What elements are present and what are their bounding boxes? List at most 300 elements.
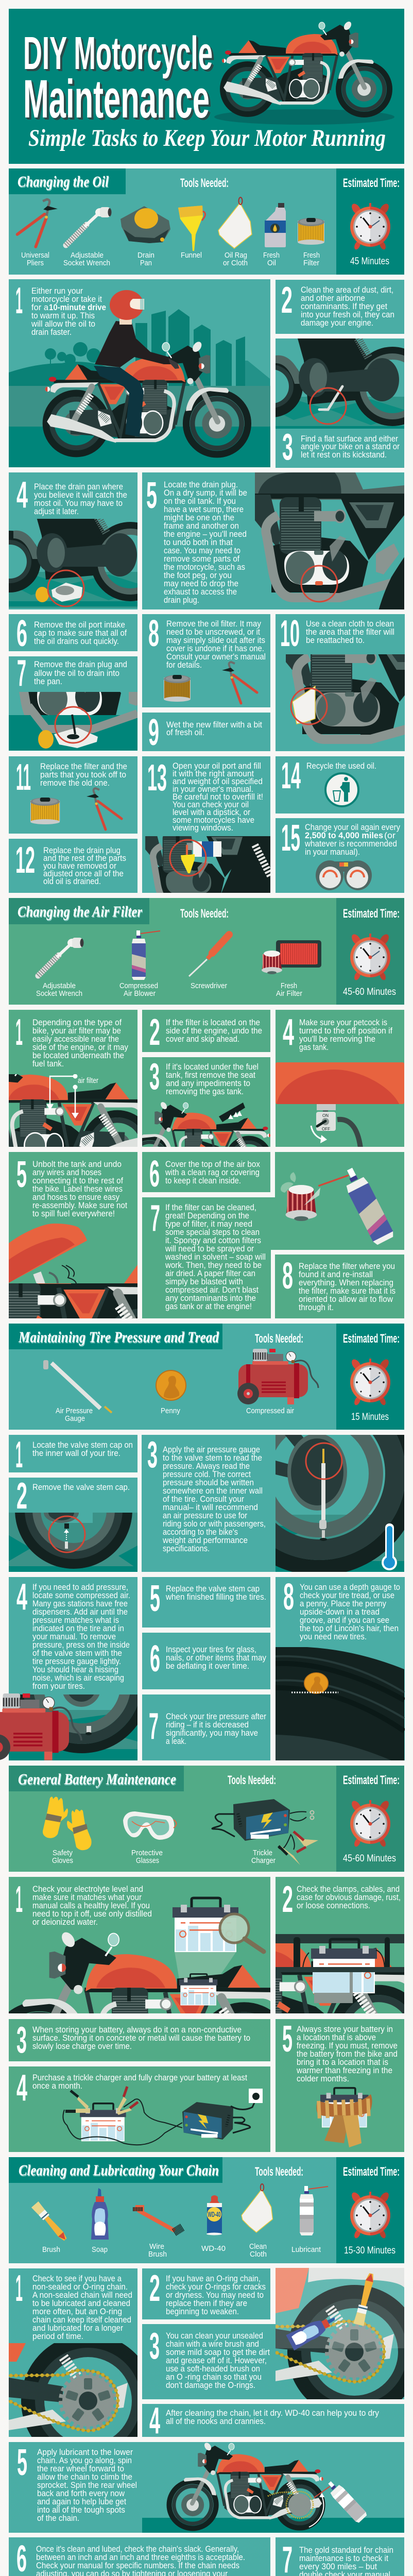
step text — [166, 720, 262, 737]
step text: the engine – you'll need — [164, 529, 247, 539]
step text — [32, 1018, 128, 1069]
step number: 2 — [149, 1012, 160, 1053]
tool labels: Funnel — [181, 251, 202, 260]
step text: riding – if it is decreased — [166, 1720, 249, 1730]
step text: remove some parts of — [164, 554, 239, 564]
step text: somewhere on the inner wall — [163, 1486, 263, 1496]
panel: oil step 11: 11 — [16, 757, 31, 798]
icon: funnel — [178, 206, 205, 251]
tool labels — [56, 1406, 294, 1423]
step text: fuel tank. — [32, 1059, 64, 1069]
heading: Maintaining Tire Pressure and Tread — [18, 1329, 219, 1346]
step text: don't damage the O-rings. — [166, 2380, 255, 2390]
step text: If the filter is located on the — [166, 1018, 260, 1027]
step text: Always store your battery in — [297, 2024, 393, 2034]
step text: a penny. Place the penny — [300, 1599, 386, 1608]
icon: pliers — [87, 788, 124, 829]
step text: Either run your — [31, 286, 83, 296]
step number: 8 — [283, 1577, 294, 1618]
step text: beginning to weaken. — [166, 2307, 239, 2316]
step text: be deflating it over time. — [166, 1661, 249, 1671]
step text: level with a dipstick, or — [173, 807, 250, 817]
estimated time value: 45 Minutes — [350, 256, 389, 267]
illustration: cloth cleaning engine — [286, 654, 405, 744]
tool labels: Compressed air — [246, 1406, 294, 1415]
step text: allow the oil to drain into — [34, 668, 119, 678]
tools heading: Tools Needed: — [228, 1773, 276, 1787]
tool labels: Brush — [42, 2245, 60, 2254]
step text: upside-down in a tread — [300, 1607, 380, 1617]
panel: air step 6 — [142, 1152, 270, 1195]
illustration: air filter location — [9, 1074, 137, 1147]
step text: and weight of oil specified — [173, 776, 263, 786]
step text: pressure. Always read the — [163, 1461, 250, 1471]
tool labels: Gloves — [52, 1856, 73, 1865]
tool labels — [42, 2242, 321, 2259]
step text: Make sure your petcock is — [299, 1018, 387, 1027]
step text: you'll be removing the — [299, 1034, 375, 1044]
step text: Purchase a trickle charger and fully charge your battery at least — [32, 2073, 247, 2082]
illustration: petcock off: ON — [322, 1113, 329, 1118]
panel: air step 1 — [9, 1010, 137, 1147]
icon: gloves — [43, 1797, 92, 1850]
step text: and any impediments to — [166, 1078, 250, 1088]
panel: tire step 5 — [142, 1577, 270, 1628]
step text: found it and re-install — [299, 1269, 373, 1279]
panel: tire step 3: 3 — [147, 1434, 158, 1476]
icon: fresh filter — [298, 218, 324, 245]
tool labels: Penny — [161, 1406, 180, 1415]
step text: Replace the filter where you — [299, 1261, 395, 1271]
step text: weight and performance — [162, 1535, 248, 1545]
panel: battery step 2 — [276, 1877, 404, 2013]
panel: tire step 1: 1 — [15, 1434, 23, 1476]
step text: Check your electrolyte level and — [32, 1884, 143, 1894]
step text: the filter, make sure that it is — [299, 1286, 395, 1296]
panel: tire step 5: 5 — [150, 1578, 160, 1619]
step text: any wires and hoses — [32, 1167, 101, 1177]
step text — [164, 480, 247, 605]
step text: any contaminants into the — [165, 1293, 256, 1303]
tool labels: Soap — [92, 2245, 108, 2254]
step text: case for obvious damage, rust, — [297, 1892, 401, 1902]
step text: Remove the drain plug and — [34, 659, 127, 669]
step text: a location that is above — [297, 2032, 376, 2042]
step text: air dried. A paper filter can — [165, 1268, 255, 1278]
tools heading: Tools Needed: — [180, 176, 229, 190]
illustration: petcock off — [276, 1062, 404, 1148]
step text: when finished filling the tires. — [165, 1592, 266, 1602]
step text: manual calls a healthy level. If you — [32, 1901, 150, 1910]
illustration: removing seat — [142, 1102, 270, 1147]
step text: chain can keep itself cleaned — [32, 2315, 131, 2325]
step text: tank, first remove the seat — [166, 1070, 255, 1080]
step text: 10-minute drive — [49, 302, 106, 312]
step text: locate some compressed air. — [32, 1590, 130, 1600]
step text: adjusted once all of the — [43, 869, 124, 878]
step text: pressure cold. The correct — [163, 1469, 251, 1479]
panel: oil step 14: 14 — [281, 755, 301, 796]
step text: warmer than freezing in the — [296, 2065, 392, 2075]
panel: oil step 7: 7 — [17, 653, 26, 694]
step text: Recycle the used oil. — [306, 761, 376, 771]
step text: chain. As you go along, spin — [37, 2455, 132, 2465]
step text: with a clean rag or covering — [165, 1167, 260, 1177]
step text: drain plug. — [164, 595, 199, 605]
step text: simply be blasted with — [165, 1277, 243, 1286]
step text: motorcycle or take it — [31, 294, 102, 304]
step text — [165, 1202, 266, 1311]
panel: chain step 4 — [142, 2400, 404, 2442]
panel: battery step 3: 3 — [16, 2020, 27, 2061]
step text: turned to the off position if — [299, 1026, 392, 1036]
tools heading: Tools Needed: — [255, 1332, 303, 1346]
tool labels: Socket Wrench — [36, 989, 82, 998]
step text: an O -ring chain so that you — [166, 2372, 262, 2382]
step text: Many gas stations have free — [32, 1599, 128, 1608]
illustration: rider on motorcycle in city — [9, 290, 270, 467]
step text: the pan. — [34, 676, 62, 686]
ground shadow — [214, 109, 394, 125]
tool labels: Drain — [137, 251, 154, 260]
step text: need to be unscrewed, or it — [166, 627, 260, 637]
step text: the area that the filter will — [306, 627, 394, 637]
icon: goggles — [123, 1811, 176, 1840]
tool labels: Wire — [149, 2242, 164, 2251]
tool labels: Protective — [131, 1849, 163, 1857]
step text: The gold standard for chain — [299, 2545, 393, 2555]
step text: the inner wall of your tire. — [32, 1448, 121, 1458]
step text: you need new tires. — [300, 1632, 367, 1641]
step text: great! Depending on the — [165, 1211, 249, 1221]
tool labels: Air Pressure — [56, 1406, 93, 1415]
step text — [304, 822, 400, 857]
panel: oil step 12 — [9, 839, 137, 893]
step text: Apply lubricant to the lower — [37, 2447, 133, 2457]
panel: oil step 1: 1 — [15, 280, 23, 321]
step text: Replace the drain plug — [43, 845, 121, 855]
step text: adjust it later. — [34, 506, 79, 516]
step text — [32, 2025, 250, 2051]
step text: allow the chain to climb the — [37, 2472, 132, 2482]
step text — [166, 1711, 266, 1746]
step text — [299, 1261, 395, 1312]
step text: Wet the new filter with a bit — [166, 720, 262, 730]
step text: nails, or other items that may — [166, 1653, 266, 1663]
step text: on the oil tank. If you — [164, 496, 236, 506]
title: Maintenance — [23, 69, 210, 129]
step text: case. You may need to — [164, 546, 240, 555]
step text: cover is undone if it has one. — [166, 643, 264, 653]
step text: remove the old one. — [40, 778, 110, 788]
tool labels: Air Blower — [124, 989, 156, 998]
step text: to the valve stem to read the — [163, 1453, 262, 1463]
tool labels: Cloth — [250, 2250, 267, 2259]
tool labels: Adjustable — [71, 251, 104, 260]
tool labels: Safety — [53, 1849, 73, 1857]
step text — [37, 2447, 137, 2523]
step text: replace them if they are — [166, 2298, 247, 2308]
motorcycle illustration — [222, 20, 389, 114]
step text: the rear wheel forward to — [37, 2464, 124, 2473]
step text: pressure should be written — [163, 1478, 254, 1487]
step text: of the valve stem with the — [32, 1648, 122, 1658]
step text: and hoses to ensure easy — [32, 1192, 119, 1202]
step text: work. Then, they need to be — [165, 1260, 262, 1270]
step text: specifications. — [163, 1544, 210, 1553]
illustration: air filter location: air filter — [78, 1076, 98, 1085]
section header: changing the air filter — [9, 898, 404, 1005]
step text — [299, 1018, 392, 1052]
tool labels: Glasses — [136, 1856, 159, 1865]
step number: 5 — [146, 475, 157, 516]
estimated time value: 15-30 Minutes — [344, 2245, 395, 2256]
panel: air step 7 — [142, 1152, 404, 1318]
step text: frame and another on — [164, 521, 239, 531]
illustration: valve stem cap — [9, 1513, 137, 1572]
step text: removing the gas tank. — [166, 1087, 244, 1096]
step text — [296, 2024, 398, 2083]
illustration: drain plug location — [255, 472, 412, 611]
step text — [34, 620, 127, 646]
step text: and lubricated for a longer — [32, 2323, 123, 2333]
panel: tire step 2 — [9, 1478, 137, 1572]
step text: (or — [384, 831, 395, 840]
step text: whatever is recommended — [304, 839, 397, 849]
tool labels — [21, 251, 320, 267]
step text: compressed air. Don't blast — [165, 1285, 259, 1295]
step text: You can check your oil — [173, 800, 249, 809]
step text — [166, 2274, 266, 2316]
step text — [32, 1582, 130, 1691]
panel: oil step 2 — [276, 280, 404, 334]
panel: oil step 13: 13 — [147, 757, 167, 799]
step text: Apply the air pressure gauge — [163, 1445, 260, 1454]
step text: or deionized water. — [32, 1917, 98, 1927]
illustration: charging battery — [63, 2087, 263, 2145]
icon: clock — [350, 933, 391, 981]
panel: air step 1: 1 — [15, 1012, 23, 1053]
tool labels: Pan — [140, 259, 152, 267]
step text: type of filter, it may need — [165, 1219, 252, 1229]
step text: and the rest of the parts — [43, 853, 126, 863]
step number: 2 — [282, 1879, 293, 1920]
step text: and grease off of it. However, — [166, 2355, 267, 2365]
panel: tire step 8 — [276, 1577, 405, 1760]
step text: gas tank or at the engine! — [165, 1301, 252, 1311]
panel: battery step 1 — [9, 1877, 270, 2013]
step text: viewing windows. — [173, 823, 233, 833]
step text: period of time. — [32, 2331, 83, 2341]
section header: cleaning and lubricating chain — [9, 2157, 404, 2263]
title banner — [9, 9, 404, 164]
icon: oil rag — [218, 197, 252, 248]
illustration: chain and sprocket — [9, 2343, 137, 2437]
step text — [32, 1159, 127, 1218]
step text — [301, 285, 394, 328]
step text: check your O-rings for cracks — [166, 2282, 266, 2292]
step text: and other airborne — [301, 293, 365, 303]
step text: connecting it to the rest of — [32, 1176, 123, 1185]
title: DIY Motorcycle — [23, 28, 213, 79]
panel: oil step 13 — [142, 756, 270, 893]
step number: 8 — [282, 1256, 293, 1297]
step text: pressure, press on the inside — [32, 1640, 130, 1650]
step text: Be careful not to overfill it! — [173, 792, 263, 802]
step text: Unbolt the tank and undo — [32, 1159, 122, 1169]
step number: 3 — [282, 427, 293, 468]
panel: chain step 1: 1 — [15, 2268, 23, 2309]
icon: socket wrench — [66, 207, 111, 245]
step text: have a wet sump, there — [164, 504, 244, 514]
step text: significantly, you may have — [166, 1728, 258, 1738]
panel: air step 7: 7 — [150, 1198, 160, 1239]
step text: everything. When replacing — [299, 1278, 393, 1287]
step text: parts that you took off to — [40, 770, 126, 779]
step text: Find a flat surface and either — [301, 434, 398, 444]
illustration: frame closeup — [9, 1283, 137, 1318]
step text: will need to be sprayed or — [165, 1244, 254, 1253]
step text: You should hear a hissing — [32, 1665, 118, 1674]
icon: brush — [31, 2201, 69, 2243]
tool labels: Filter — [303, 259, 319, 267]
step number: 2 — [149, 2268, 160, 2309]
step text: or loose connections. — [297, 1901, 370, 1910]
step text: A non-sealed chain will need — [32, 2290, 132, 2300]
panel: tire step 7: 7 — [149, 1706, 159, 1747]
step text: If you need to add pressure, — [32, 1582, 128, 1592]
step text: indicated on the tire and in — [32, 1623, 124, 1633]
step text: After cleaning the chain, let it dry. WD-40 can help you to dry — [166, 2408, 379, 2418]
tool labels: Charger — [251, 1856, 276, 1865]
step text: Consult your owner's manual — [166, 652, 266, 662]
panel: air step 2 — [142, 1010, 270, 1053]
step text: let it rest on its kickstand. — [301, 450, 387, 460]
panel: air step 8 — [275, 1255, 404, 1318]
panel: chain step 3: 3 — [149, 2326, 160, 2367]
step text: to be lubricated and cleaned — [32, 2298, 130, 2308]
panel: oil step 15: 15 — [281, 818, 300, 859]
icon: trickle charger — [212, 1799, 318, 1865]
panel: tire step 7 — [142, 1694, 270, 1760]
tool labels: Fresh — [281, 981, 297, 990]
icon: pliers — [222, 662, 260, 703]
step text: or dryness. You may need to — [166, 2290, 264, 2300]
step text: Place the drain pan where — [34, 482, 123, 492]
icon: clock — [350, 202, 391, 250]
step text: will allow the oil to — [31, 319, 95, 329]
step text: of fresh oil. — [166, 727, 204, 737]
panel: air step 5: 5 — [16, 1154, 27, 1195]
panel: chain step 5 — [9, 2442, 404, 2534]
step number: 4 — [16, 1577, 27, 1618]
icon: WD-40 — [206, 2195, 222, 2235]
icon: clock — [350, 2191, 391, 2239]
step text: drain faster. — [31, 327, 72, 337]
section header: battery maintenance — [9, 1766, 404, 1872]
step text: in your owner's manual. — [173, 784, 253, 794]
step text: You can use a depth gauge to — [300, 1582, 400, 1592]
step text: of the chain. — [37, 2513, 79, 2523]
panel: oil step 14 — [276, 755, 404, 814]
illustration: penny tread test — [276, 1647, 404, 1760]
heading: Changing the Air Filter — [18, 903, 142, 920]
panel: tire step 6 — [142, 1633, 270, 1689]
step text — [299, 2545, 393, 2576]
illustration: battery with scarf — [316, 2088, 372, 2147]
section header: tire pressure and tread — [9, 1324, 404, 1430]
icon: clock — [350, 1358, 391, 1406]
step text: more often, but an O-ring — [32, 2307, 122, 2316]
icon: pressure gauge — [43, 1360, 112, 1413]
tool labels: WD-40 — [201, 2244, 226, 2253]
step text: damage your engine. — [301, 318, 373, 328]
panel: battery step 5 — [276, 2019, 404, 2152]
step text: into your fresh oil, they can — [301, 310, 394, 319]
estimated time value: 15 Minutes — [351, 1412, 389, 1422]
step number: 8 — [148, 613, 159, 654]
step text: in your manual). — [305, 847, 360, 857]
illustration: lifted tank — [9, 1224, 137, 1286]
step text: dispensers. Add air until the — [32, 1607, 128, 1617]
icon: clean cloth — [242, 2184, 272, 2232]
step text: oriented to allow air to flow — [299, 1294, 393, 1304]
step text: If you have an O-ring chain, — [166, 2274, 261, 2283]
icon: new filter — [30, 798, 60, 824]
step text: colder months. — [297, 2074, 349, 2083]
step text — [36, 2544, 245, 2576]
step text: Check your manual for specific numbers. If the chain needs — [36, 2561, 239, 2570]
step text: Check to see if you have a — [32, 2274, 122, 2283]
step text: sprocket. Spin the rear wheel — [37, 2480, 137, 2490]
icon: soap — [91, 2188, 109, 2240]
step text: it with the right amount — [173, 769, 254, 778]
step text: riding solo or with passengers, — [163, 1519, 266, 1529]
panel: chain step 3 — [142, 2268, 404, 2399]
estimated time value: 45-60 Minutes — [343, 987, 396, 997]
step text: Depending on the type of — [32, 1018, 122, 1027]
step text: between an inch and an inch and three eighths is acceptable. — [36, 2552, 245, 2562]
panel: oil step 10: 10 — [280, 613, 300, 654]
step text — [300, 1582, 400, 1641]
step text: an air pressure to use for — [163, 1511, 247, 1520]
icon: WD-40: WD-40 — [208, 2210, 220, 2219]
icon: clock — [350, 1799, 391, 1848]
step text: Replace the filter and the — [40, 761, 127, 771]
icon: penny — [156, 1370, 186, 1400]
step text: When storing your battery, always do it on a non-conductive — [32, 2025, 242, 2035]
step number: 4 — [16, 474, 28, 516]
step text: use a soft-headed brush on — [166, 2364, 260, 2374]
step text — [34, 659, 127, 686]
step text: You can clean your unsealed — [166, 2331, 263, 2341]
tool labels: Air Filter — [276, 989, 302, 998]
step text: be located underneath the — [32, 1050, 124, 1060]
step text: contaminants. If they get — [301, 301, 387, 311]
step text — [32, 2274, 132, 2341]
step text — [166, 2408, 379, 2426]
icon: screwdriver — [189, 935, 229, 976]
step text — [34, 482, 127, 516]
panel: oil step 3 — [276, 338, 404, 468]
step text: might be one on the — [164, 513, 234, 522]
step text: into all of the tough spots — [37, 2505, 125, 2515]
step text: the battery from the bike and — [297, 2049, 398, 2059]
step text: and again to help lube get — [37, 2497, 126, 2506]
step text: for details. — [166, 660, 202, 670]
step text: exhaust to access the — [164, 587, 237, 597]
step text: Once it's clean and lubed, check the chain's slack. Generally, — [36, 2544, 239, 2554]
